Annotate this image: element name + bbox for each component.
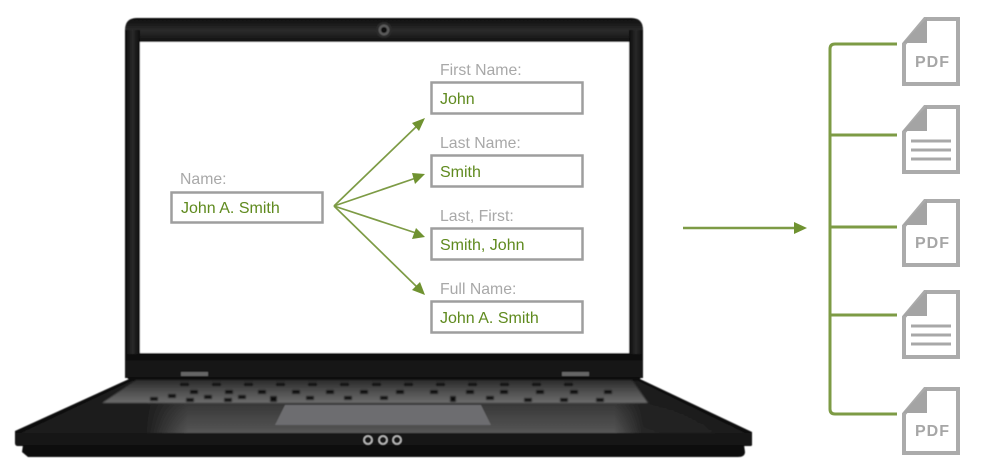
icon: PDF document 1 (903, 18, 958, 84)
webcam (376, 22, 392, 38)
field: full name: Full Name: (440, 281, 516, 298)
document tree connector (830, 44, 897, 414)
laptop lid (125, 18, 643, 379)
field: first name (432, 62, 582, 114)
laptop shadow (22, 445, 745, 457)
field: last name: Smith (440, 164, 481, 181)
field: last name: Last Name: (440, 135, 521, 152)
field: last, first: Smith, John (440, 237, 524, 254)
split arrows (334, 118, 425, 295)
output arrow (683, 222, 807, 234)
icon: PDF document 5: PDF (915, 423, 950, 440)
laptop base (15, 379, 752, 446)
icon: PDF document 3 (903, 200, 958, 265)
form: name input (172, 171, 322, 222)
front edge (16, 433, 751, 445)
status lights (364, 436, 401, 444)
icon: text document 4 (903, 291, 958, 357)
field: last, first (432, 208, 582, 260)
screen (140, 42, 629, 353)
icon: PDF document 3: PDF (915, 235, 950, 252)
keyboard (102, 380, 648, 403)
field: first name: First Name: (440, 62, 522, 79)
field: full name (432, 281, 582, 332)
icon: text document 2 (903, 106, 958, 172)
hinges (181, 372, 589, 376)
form: name input: Name: (180, 171, 227, 188)
field: full name: John A. Smith (440, 310, 539, 327)
icon: PDF document 1: PDF (915, 54, 950, 71)
form: name input: John A. Smith (181, 200, 280, 217)
field: last name (432, 135, 582, 186)
field: last, first: Last, First: (440, 208, 514, 225)
trackpad (275, 405, 491, 425)
laptop (15, 18, 752, 457)
field: first name: John (440, 91, 475, 108)
icon: PDF document 5 (903, 388, 958, 453)
